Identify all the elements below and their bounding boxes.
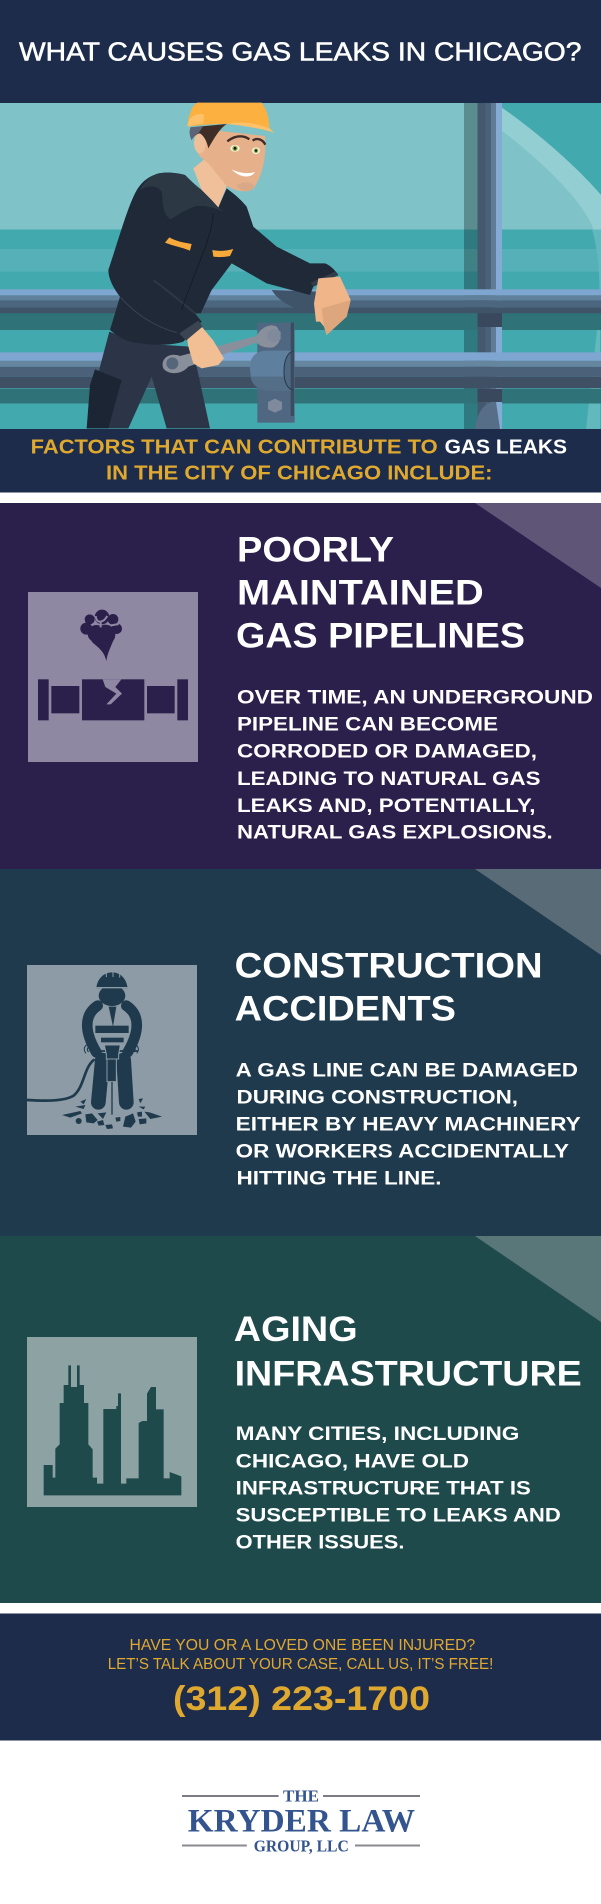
logo: The Kryder Law Group, LLC: THE: [283, 1786, 319, 1805]
lower horizontal pipe: [0, 352, 601, 388]
header panel: [0, 0, 601, 103]
call to action text: HAVE YOU OR A LOVED ONE BEEN INJURED?: [130, 1637, 475, 1654]
body text: CHICAGO, HAVE OLD: [236, 1451, 469, 1472]
horizontal pipe shadows: [0, 313, 601, 404]
heading: POORLY: [237, 531, 394, 570]
logo: The Kryder Law Group, LLC: KRYDER LAW: [188, 1804, 415, 1840]
heading: ACCIDENTS: [235, 989, 456, 1028]
body text: CORRODED OR DAMAGED,: [237, 742, 537, 763]
factors intro band: [0, 429, 601, 492]
logo: The Kryder Law Group, LLC: [182, 1786, 420, 1856]
body text: OVER TIME, AN UNDERGROUND: [237, 687, 593, 708]
upper horizontal pipe: [0, 289, 601, 313]
body text: NATURAL GAS EXPLOSIONS.: [237, 823, 553, 844]
panel: aging infrastructure: [0, 1236, 601, 1603]
heading: MAINTAINED: [237, 573, 484, 612]
call to action panel: [0, 1614, 601, 1740]
body text: SUSCEPTIBLE TO LEAKS AND: [236, 1506, 561, 1527]
hero illustration: worker at pipes: [0, 103, 601, 429]
vertical pipe: [475, 103, 502, 429]
vertical pipe shadow: [464, 103, 478, 429]
face: [195, 128, 265, 191]
eyes: [230, 145, 240, 152]
trousers: [87, 332, 210, 428]
hair: [190, 124, 227, 148]
jacket: [108, 173, 338, 345]
pipe shadow of arm: [272, 290, 317, 313]
heading: CONSTRUCTION: [235, 946, 543, 985]
intro text: [31, 436, 567, 484]
cuff: [179, 321, 203, 341]
body text: [237, 687, 593, 844]
left hand: [187, 327, 224, 368]
body text: OTHER ISSUES.: [236, 1532, 404, 1553]
pipe clamp: [250, 323, 295, 423]
body text: HITTING THE LINE.: [236, 1168, 442, 1189]
scene background: [0, 103, 601, 429]
icon: broken leaking pipe: [28, 592, 198, 762]
body text: LEADING TO NATURAL GAS: [237, 769, 540, 790]
worker figure: [87, 103, 351, 428]
heading: [235, 946, 543, 1028]
heading: [234, 1310, 582, 1393]
body text: A GAS LINE CAN BE DAMAGED: [236, 1061, 578, 1082]
intro text: IN THE CITY OF CHICAGO INCLUDE:: [106, 462, 492, 484]
body text: LEAKS AND, POTENTIALLY,: [237, 796, 536, 817]
body text: DURING CONSTRUCTION,: [236, 1088, 518, 1109]
heading: [236, 531, 525, 655]
body text: OR WORKERS ACCIDENTALLY: [236, 1142, 569, 1163]
title: WHAT CAUSES GAS LEAKS IN CHICAGO?: [19, 37, 582, 67]
ear: [194, 133, 206, 153]
jacket highlights: [140, 173, 223, 219]
heading: AGING: [234, 1310, 358, 1349]
smile: [232, 169, 255, 176]
panel: poorly maintained gas pipelines: [0, 503, 601, 869]
body text: [236, 1424, 561, 1553]
helmet: [187, 103, 274, 132]
orange pocket flaps: [165, 237, 233, 257]
phone number: (312) 223-1700: [173, 1680, 430, 1718]
icon: city skyline: [27, 1337, 197, 1507]
body text: INFRASTRUCTURE THAT IS: [236, 1478, 531, 1499]
right pointing hand: [314, 277, 351, 335]
logo: The Kryder Law Group, LLC: GROUP, LLC: [254, 1837, 349, 1856]
body text: [236, 1061, 581, 1189]
body text: EITHER BY HEAVY MACHINERY: [236, 1115, 581, 1136]
heading: GAS PIPELINES: [236, 616, 525, 655]
wrench: [163, 325, 280, 373]
neck: [193, 157, 227, 207]
holster pocket: [87, 369, 122, 428]
bolt: [268, 399, 282, 413]
intro text: GAS LEAKS: [445, 436, 567, 458]
panel: construction accidents: [0, 869, 601, 1236]
call to action text: [108, 1637, 493, 1673]
body text: PIPELINE CAN BECOME: [237, 715, 498, 736]
intro text: FACTORS THAT CAN CONTRIBUTE TO: [31, 436, 438, 458]
icon: worker with jackhammer: [27, 965, 197, 1135]
body text: MANY CITIES, INCLUDING: [236, 1424, 519, 1445]
heading: INFRASTRUCTURE: [235, 1354, 582, 1393]
call to action text: LET’S TALK ABOUT YOUR CASE, CALL US, IT’S FREE!: [108, 1656, 493, 1673]
